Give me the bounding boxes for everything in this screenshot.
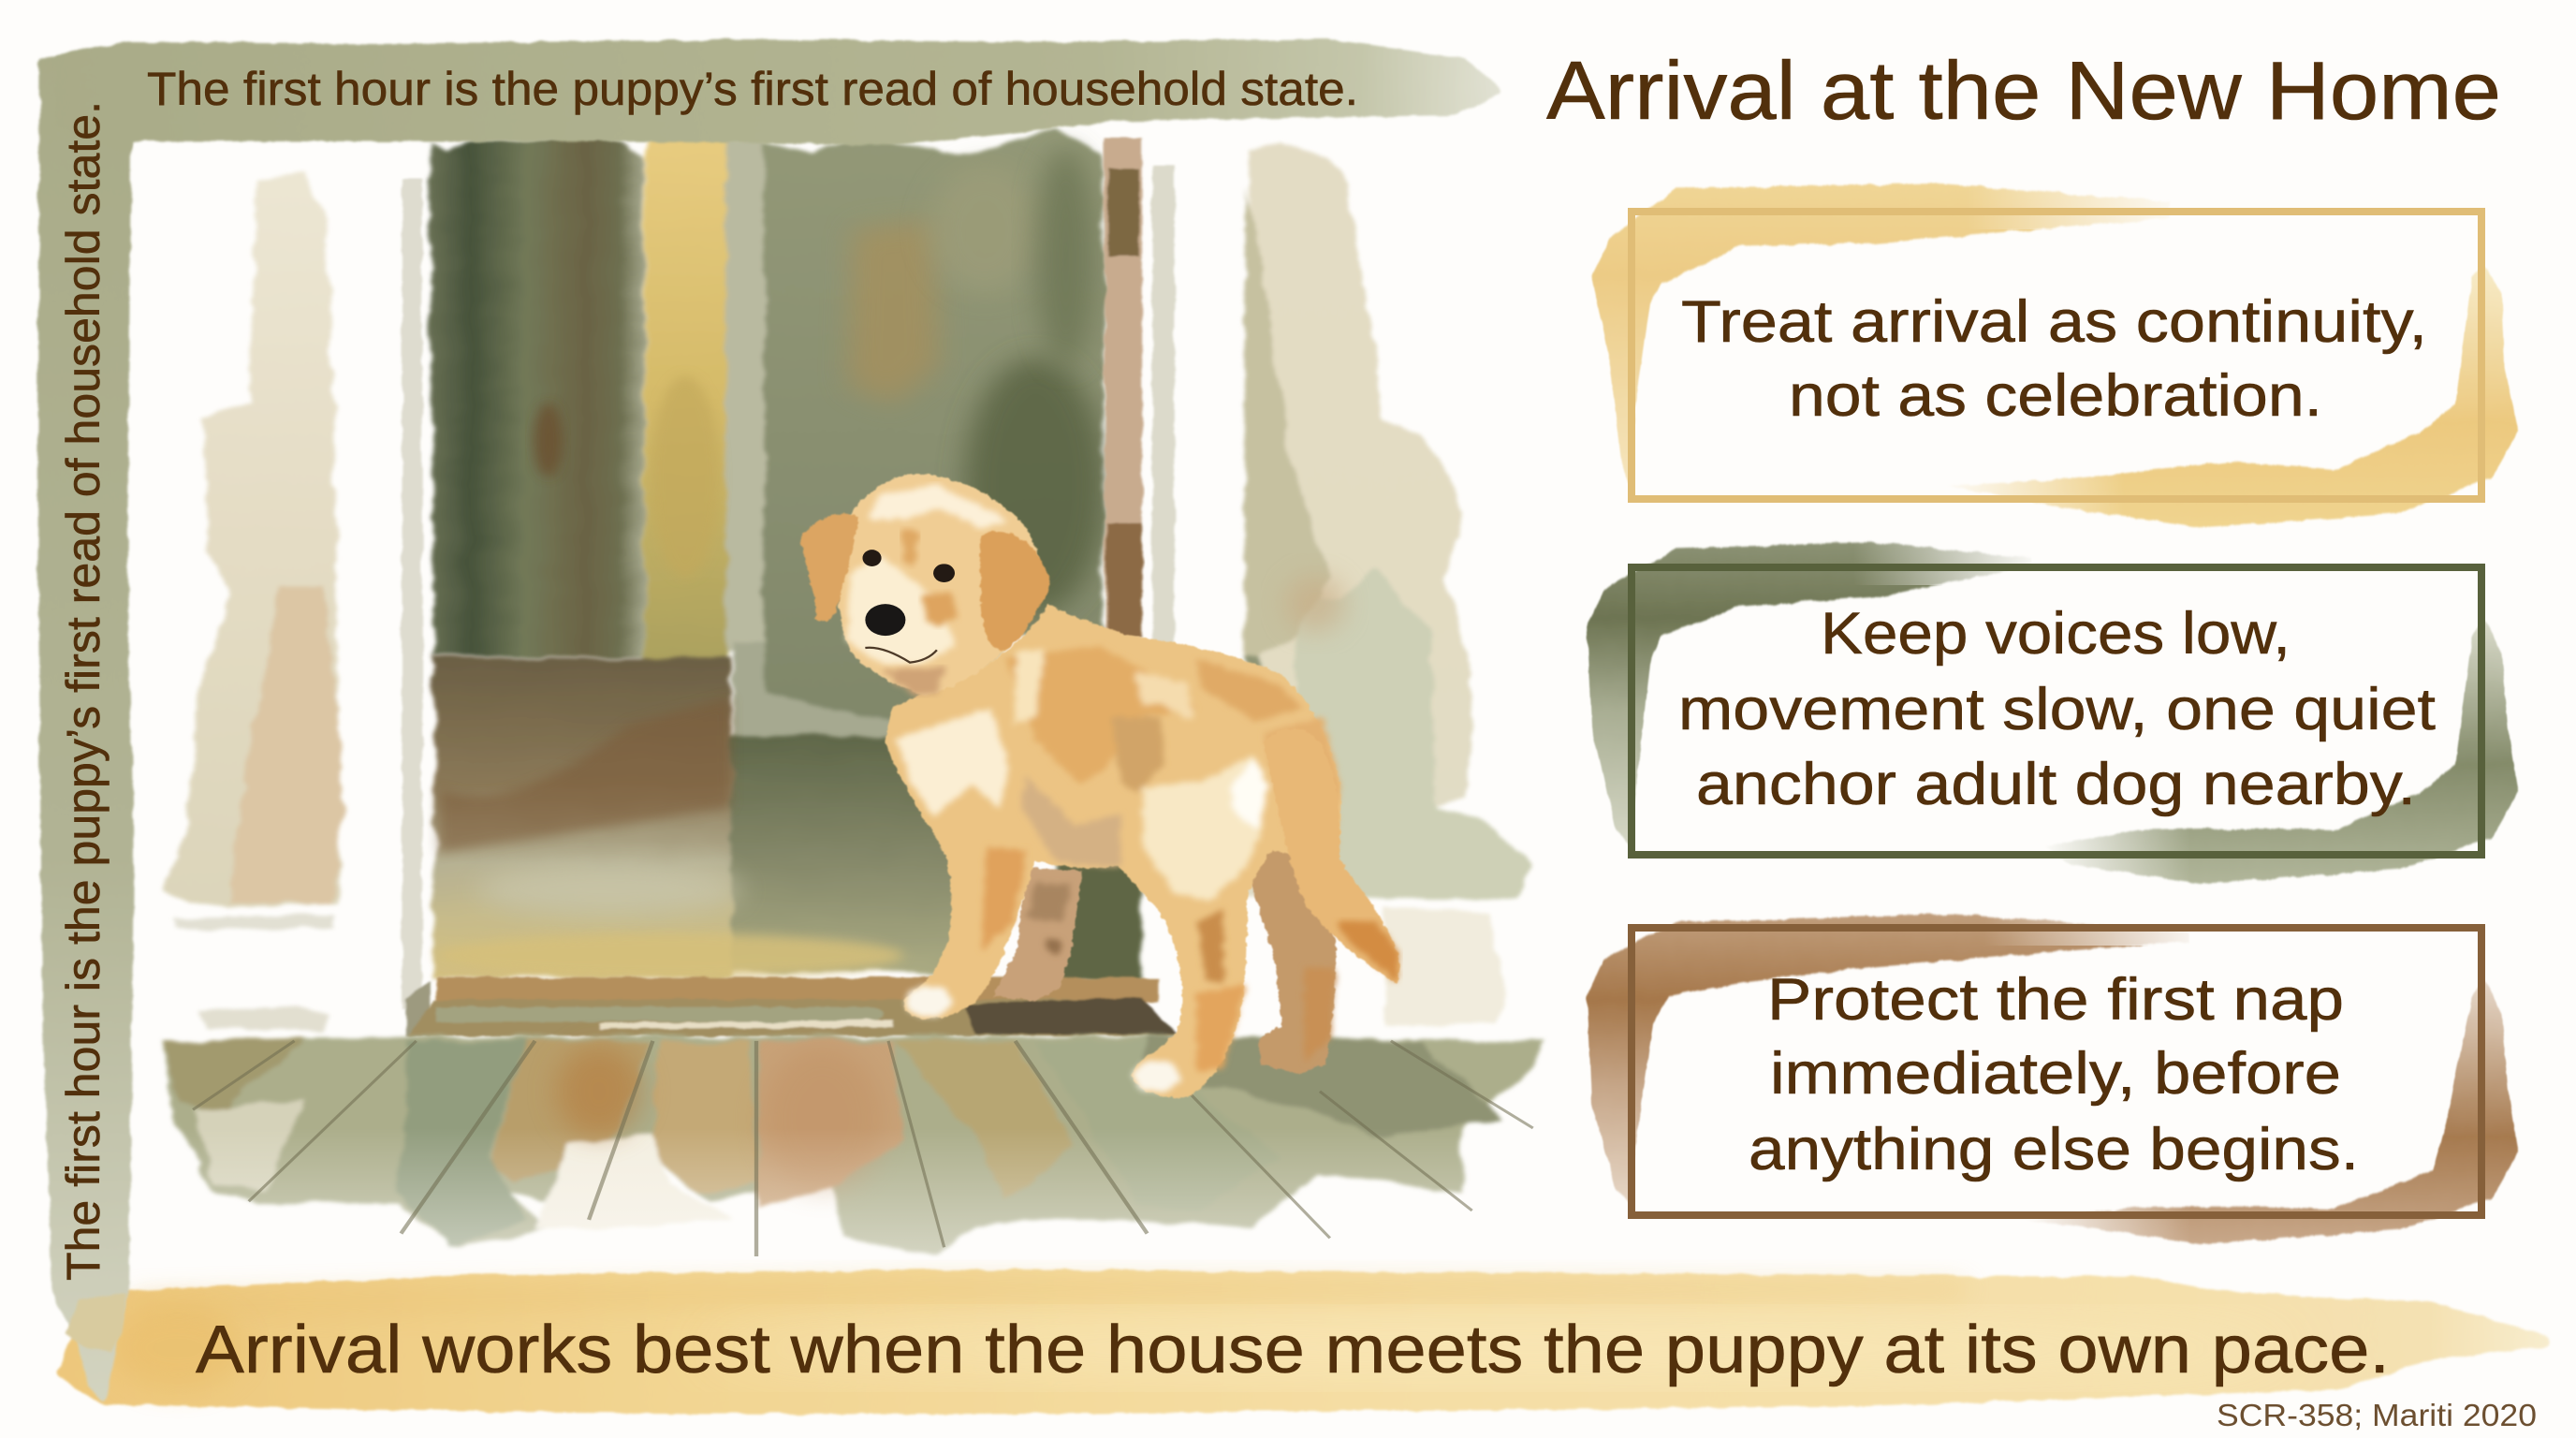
tail [1264, 728, 1399, 984]
door and left wall scene [153, 128, 1553, 1266]
threshold [408, 977, 1178, 1036]
paws [904, 938, 1179, 1093]
citation: SCR-358; Mariti 2020 [2217, 1398, 2537, 1432]
panel: calm voices card [1588, 534, 2518, 885]
closing statement text: Arrival works best when the house meets the puppy at its own pace. [196, 1313, 2390, 1387]
door upper panels [429, 128, 1105, 742]
door dark blotches [534, 147, 1106, 614]
puppy [800, 474, 1399, 1097]
floor boards [153, 1036, 1553, 1266]
door lower stain [436, 697, 903, 977]
door frame post [1105, 138, 1142, 638]
panel: continuity card [1592, 173, 2518, 527]
door lower panels [434, 656, 1142, 981]
card text: Protect the first nap [1767, 967, 2344, 1033]
left band text: The first hour is the puppy’s first read of household state. [57, 101, 110, 1281]
brown frame [1632, 928, 2481, 1215]
floor board lines [193, 1041, 1533, 1256]
head [800, 474, 1050, 696]
body markings [897, 646, 1339, 1072]
card text: movement slow, one quiet [1678, 677, 2437, 742]
watercolour painting: puppy at doorway [153, 128, 1553, 1266]
olive frame [1632, 567, 2481, 855]
card text: anchor adult dog nearby. [1696, 752, 2416, 817]
ears [800, 514, 858, 621]
far legs [993, 821, 1337, 1074]
olive wash [1588, 542, 2518, 883]
top band text: The first hour is the puppy’s first read of household state. [147, 63, 1358, 115]
white door frame lines [402, 165, 1175, 1036]
card text [1681, 289, 2427, 429]
card text: Keep voices low, [1821, 601, 2291, 667]
eyes and nose [862, 550, 882, 566]
bottom brush band [62, 1275, 2544, 1409]
band overlap tint [66, 1294, 126, 1353]
card text: not as celebration. [1789, 363, 2322, 429]
card text [1678, 601, 2437, 817]
brown wash [1588, 914, 2518, 1243]
yellow wash [1592, 183, 2518, 527]
card text: anything else begins. [1749, 1117, 2359, 1182]
top brush band [60, 44, 1496, 150]
left vertical brush band [41, 51, 130, 1397]
right wall wash [1243, 140, 1531, 1025]
card text [1749, 967, 2359, 1182]
card text: immediately, before [1770, 1041, 2341, 1107]
body [886, 604, 1341, 1097]
title: Arrival at the New Home [1546, 44, 2501, 137]
panel: first nap card [1588, 889, 2518, 1250]
left wall wash [160, 169, 344, 1032]
card text: Treat arrival as continuity, [1681, 289, 2427, 355]
yellow frame [1632, 212, 2481, 499]
